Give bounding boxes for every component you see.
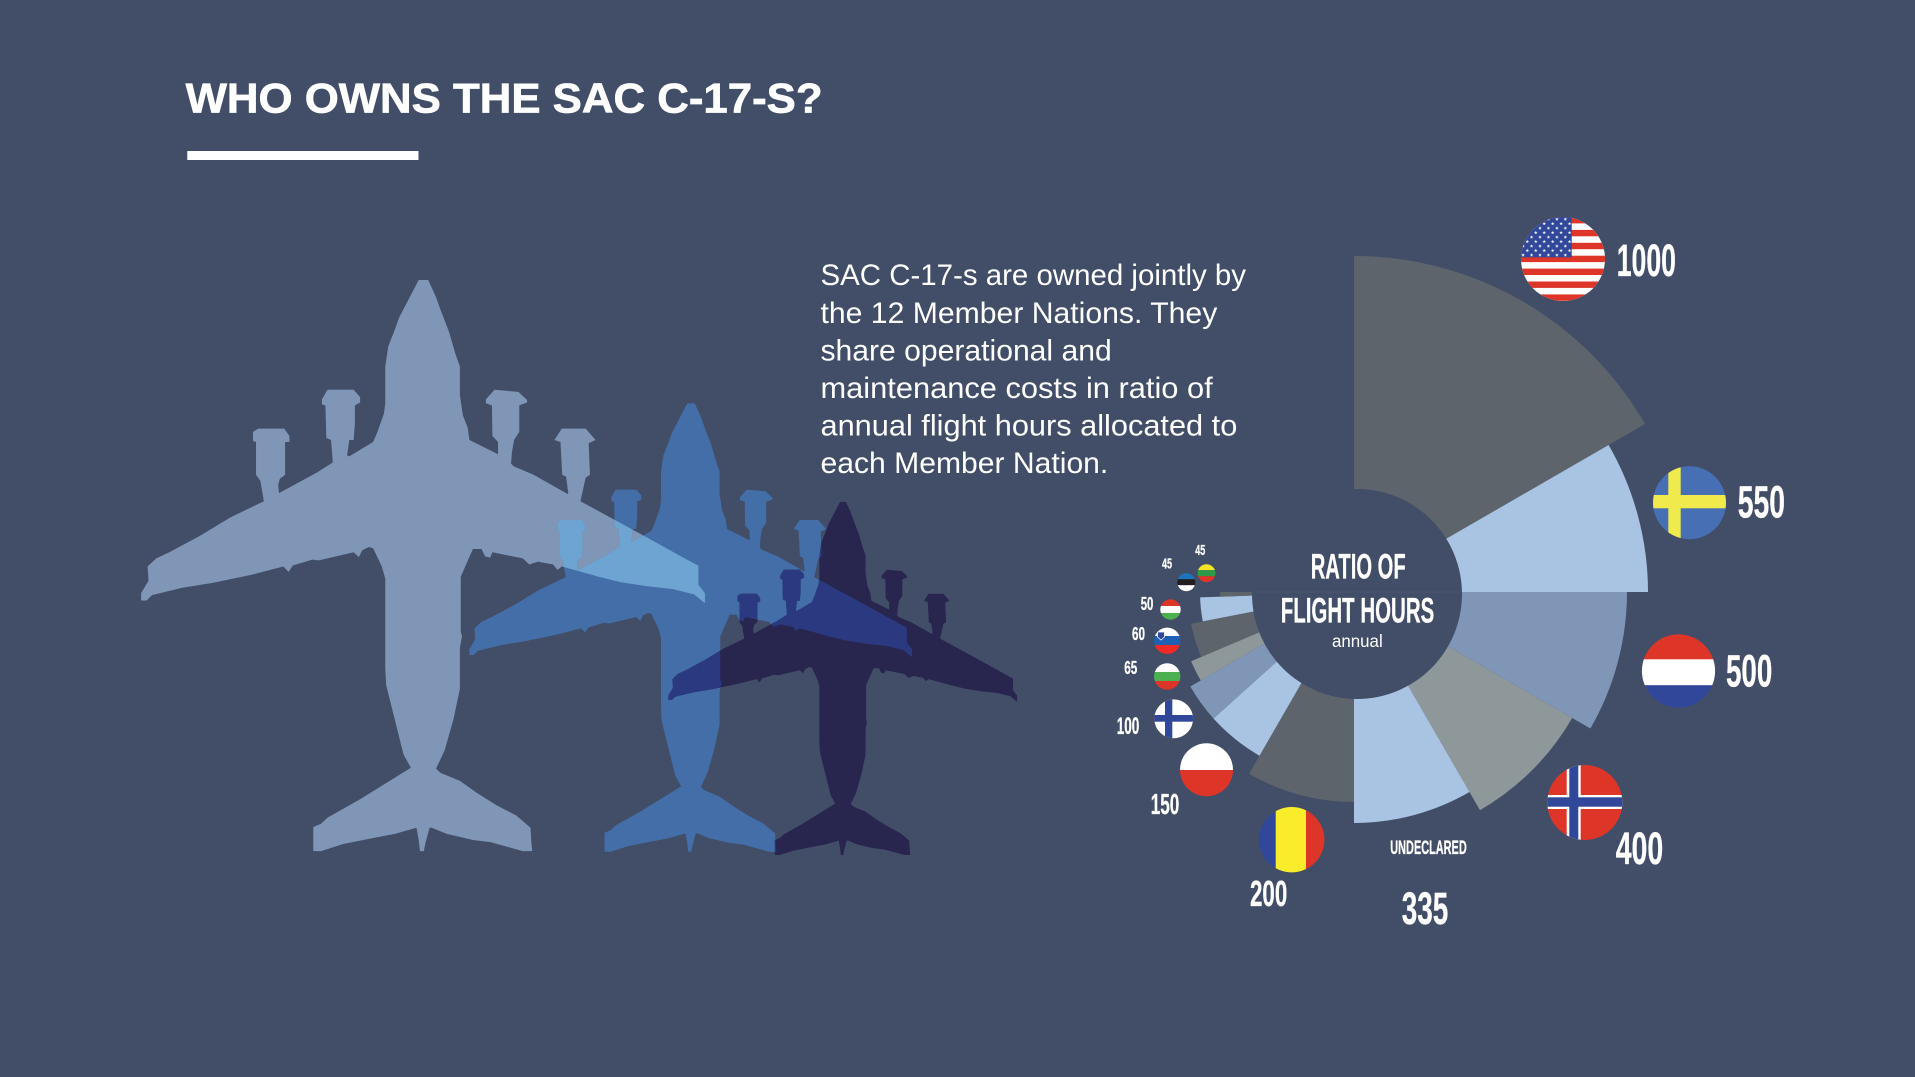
wedge: Bulgaria 65 [1191,592,1354,680]
value: Norway: 400 [1616,823,1663,874]
value: undeclared: 335 [1402,883,1448,934]
wedge: Estonia and Lithuania 45 [1220,592,1354,597]
description text: SAC C-17-s are owned jointly by [820,259,1246,292]
wedge: Sweden 550 [1354,445,1648,592]
label: undeclared: UNDECLARED [1390,837,1467,859]
flag: Finland [1154,699,1194,739]
value: Hungary: 50 [1141,593,1153,614]
value: Romania: 200 [1250,873,1287,914]
aircraft silhouettes [141,280,1017,855]
flag: Norway [1546,764,1624,842]
hub heading line two: FLIGHT HOURS [1281,591,1434,630]
overlap: light and medium planes [557,520,705,603]
wedge: undeclared 335 [1354,592,1470,823]
wedge: Netherlands 500 [1354,592,1627,728]
flag: Slovenia [1154,628,1180,654]
description text: each Member Nation. [820,447,1108,480]
plane: medium blue [469,403,912,852]
plane: large light [141,280,705,851]
value: Sweden: 550 [1738,476,1785,527]
overlap: medium and dark planes [668,544,912,852]
title: WHO OWNS THE SAC C-17-S? [186,75,823,122]
wedge: Romania 200 [1249,592,1354,802]
wedge: Hungary 50 [1200,592,1354,621]
value: Finland: 100 [1117,713,1139,740]
wedge: USA 1000 [1354,256,1645,592]
description text: share operational and [820,334,1112,368]
flag: Lithuania [1197,564,1216,582]
hub heading: RATIO OF [1311,547,1406,586]
description text: the 12 Member Nations. They [820,297,1217,330]
chart centre hub [1252,489,1462,699]
flag: Netherlands [1640,633,1716,709]
wedge: Finland 100 [1190,592,1354,718]
flag: Romania [1258,806,1326,874]
value: Estonia: 45 [1162,555,1172,572]
wedge: Slovenia 60 [1191,592,1354,657]
title underline [187,151,418,160]
flag: Poland [1179,743,1234,797]
value: Netherlands: 500 [1726,646,1772,697]
wedge: Norway 400 [1354,592,1572,810]
value: Slovenia: 60 [1132,623,1145,644]
value: Bulgaria: 65 [1124,657,1137,678]
plane: small dark [668,502,1017,855]
flag: USA [1520,216,1606,302]
description text [820,259,1246,480]
wedge: Poland 150 [1214,592,1354,756]
hub subtitle: annual [1332,631,1383,651]
flag: Estonia [1177,573,1196,591]
flag: Bulgaria [1153,663,1181,691]
radial chart: ratio of flight hours [1190,256,1648,823]
flag: Sweden [1652,465,1728,541]
value: USA: 1000 [1617,235,1676,286]
value: Poland: 150 [1151,789,1179,821]
description text: annual flight hours allocated to [820,409,1237,442]
value: Lithuania: 45 [1195,542,1205,559]
description text: maintenance costs in ratio of [820,372,1213,405]
flag: Hungary [1160,599,1181,620]
